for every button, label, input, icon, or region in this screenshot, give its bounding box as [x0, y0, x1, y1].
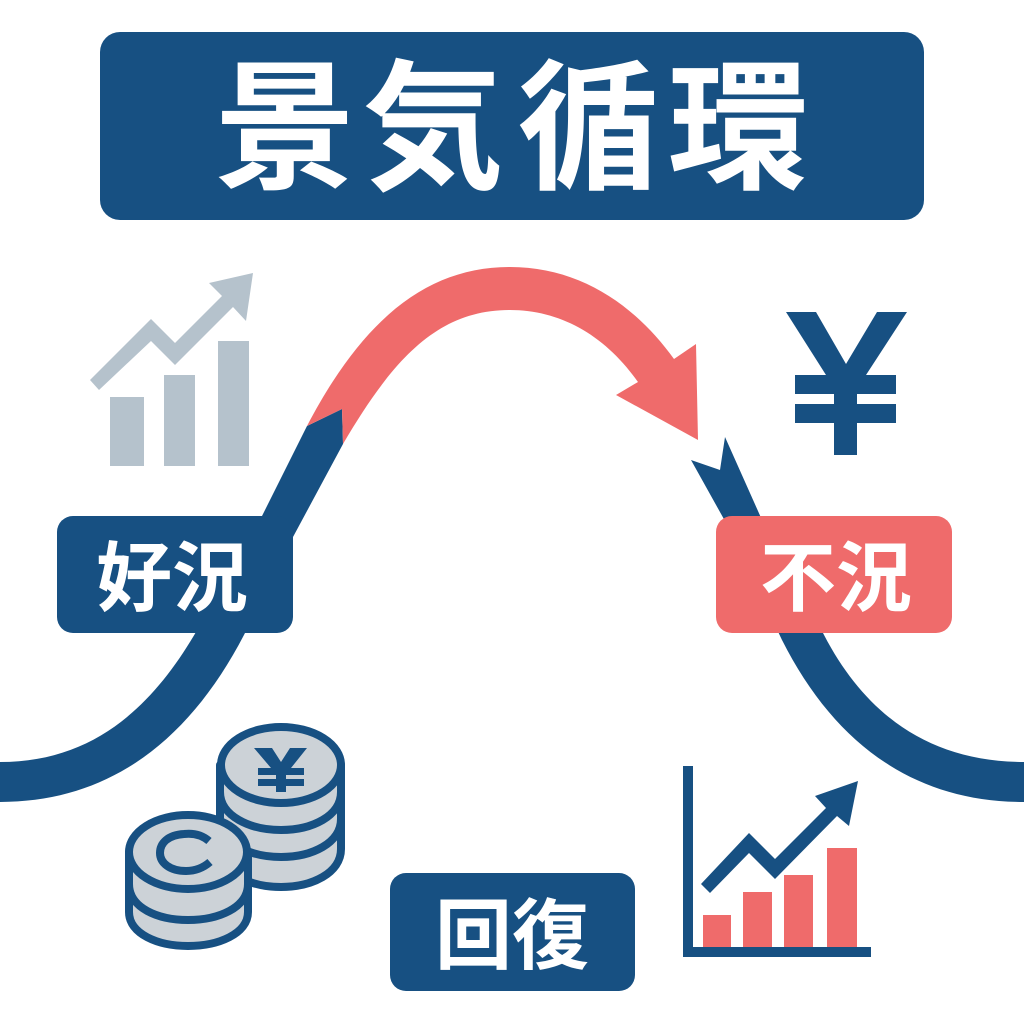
icon: coin stacks [129, 727, 341, 946]
cycle curve: falling blue segment [691, 437, 1024, 802]
coin stack: C [129, 815, 248, 946]
coin stack: yen [220, 727, 341, 887]
cycle curve: rising blue segment [0, 409, 343, 802]
label: boom: 好況 [96, 537, 248, 622]
title banner: 景気循環 [214, 50, 809, 208]
label: recession [716, 516, 952, 633]
label: boom [57, 516, 293, 633]
chart trend arrow [701, 781, 858, 893]
icon: rising grey bar chart [90, 273, 253, 466]
label: recovery [390, 873, 635, 991]
chart axes [688, 766, 871, 952]
label: recovery: 回復 [435, 894, 589, 980]
icon: yen symbol [786, 312, 907, 455]
icon: red bar chart with arrow [688, 766, 871, 952]
chart bars [703, 848, 857, 947]
red peak arrow [307, 267, 698, 444]
label: recession: 不況 [760, 537, 912, 622]
title banner [100, 32, 924, 220]
